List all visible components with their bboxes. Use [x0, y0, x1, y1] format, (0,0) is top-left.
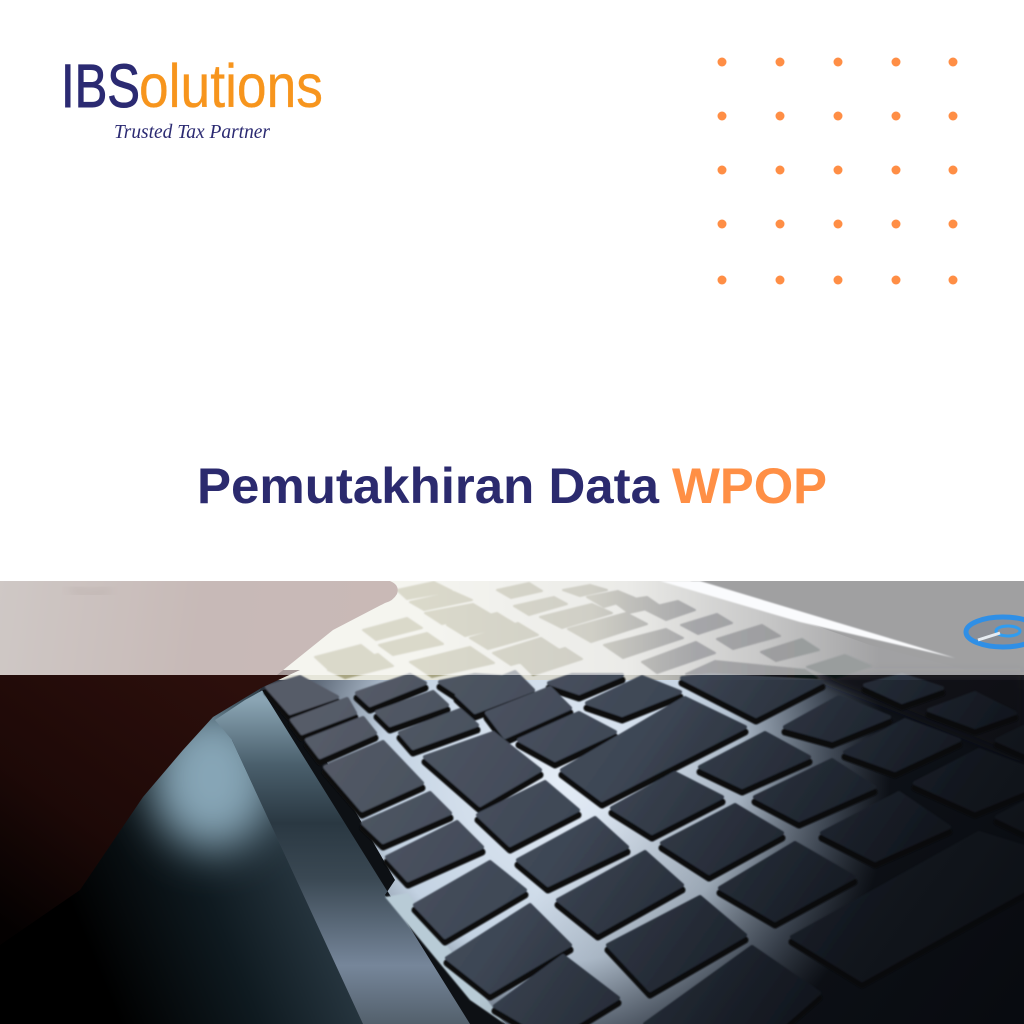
- power button: [966, 617, 1024, 647]
- keyboard deck: [232, 680, 1024, 1024]
- logo: IBSolutions: IBS: [61, 52, 140, 120]
- translucent white band: [0, 581, 1024, 675]
- right deck darkness: [810, 670, 1021, 699]
- upper deck: [278, 581, 874, 680]
- palm rest: [0, 680, 380, 1024]
- body edge reflection: [660, 581, 955, 658]
- photo: hand on laptop keyboard: [0, 581, 1024, 1024]
- key tops: [267, 672, 1024, 1024]
- hand lower part in shadow: [0, 670, 300, 945]
- logo: IBSolutions: olutions: [139, 52, 323, 120]
- key shadows: [267, 677, 1024, 1024]
- bright deck sliver beside keys: [385, 893, 505, 1024]
- title: Pemutakhiran Data: [197, 458, 660, 514]
- bottom right shadow: [480, 680, 1024, 1024]
- decorative dot grid: [718, 58, 958, 284]
- dark keyboard edge: [262, 690, 505, 1024]
- logo tagline: Trusted Tax Partner: [114, 121, 270, 143]
- logo: IBSolutions: [61, 52, 323, 143]
- laptop body: [690, 581, 858, 640]
- bezel strip: [215, 690, 470, 1024]
- palm rest glow: [150, 706, 274, 850]
- finger notch shadow: [70, 588, 110, 594]
- dark keys: [267, 672, 1024, 1024]
- light keys in upper rows: [315, 582, 871, 678]
- finger and hand in upper band: [0, 581, 398, 675]
- title: WPOP: [672, 458, 827, 514]
